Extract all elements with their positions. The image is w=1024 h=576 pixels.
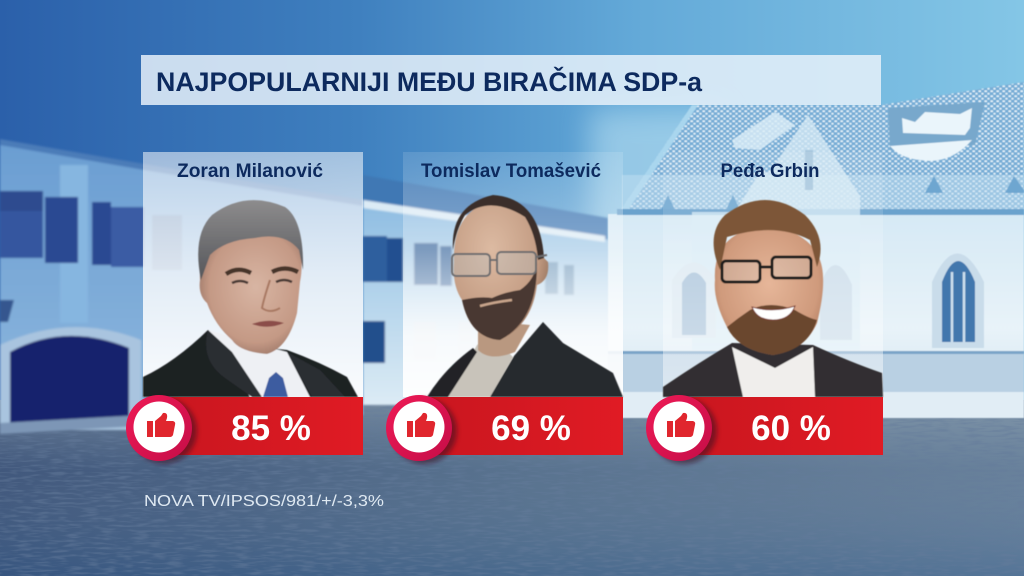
name: Peđa Grbin (720, 161, 820, 182)
value: 60 % (751, 409, 831, 448)
title text: NAJPOPULARNIJI MEĐU BIRAČIMA SDP-a (156, 67, 702, 97)
roof band (622, 175, 1024, 213)
panel: Peđa Grbin (646, 152, 883, 464)
portrait (143, 200, 358, 397)
icon: thumbs up badge (646, 395, 717, 464)
lamp (0, 300, 14, 322)
panel: Zoran Milanović (126, 152, 363, 464)
percentage bar (165, 397, 363, 455)
portrait (663, 200, 883, 397)
church (608, 82, 1024, 418)
percentage bar (685, 397, 883, 455)
value: 85 % (231, 409, 311, 448)
middle building (363, 175, 610, 405)
panel: Tomislav Tomašević (386, 152, 623, 464)
left building (0, 139, 363, 434)
church wall (608, 214, 1024, 404)
icon: thumbs up badge (386, 395, 457, 464)
icon: thumbs up badge (126, 395, 197, 464)
church roof (617, 82, 1024, 215)
title bar (141, 55, 881, 105)
middle window (820, 265, 852, 340)
source note: NOVA TV/IPSOS/981/+/-3,3% (144, 493, 384, 510)
coat of arms on roof (888, 102, 985, 161)
cobblestone ground (0, 400, 1024, 576)
light haze (590, 110, 720, 240)
name: Tomislav Tomašević (421, 161, 601, 182)
gable (692, 115, 860, 350)
name: Zoran Milanović (177, 161, 323, 182)
percentage bar (425, 397, 623, 455)
checker shield on roof (732, 112, 795, 150)
value: 69 % (491, 409, 571, 448)
right window (932, 254, 984, 348)
left window (672, 262, 716, 338)
portrait (427, 195, 623, 397)
